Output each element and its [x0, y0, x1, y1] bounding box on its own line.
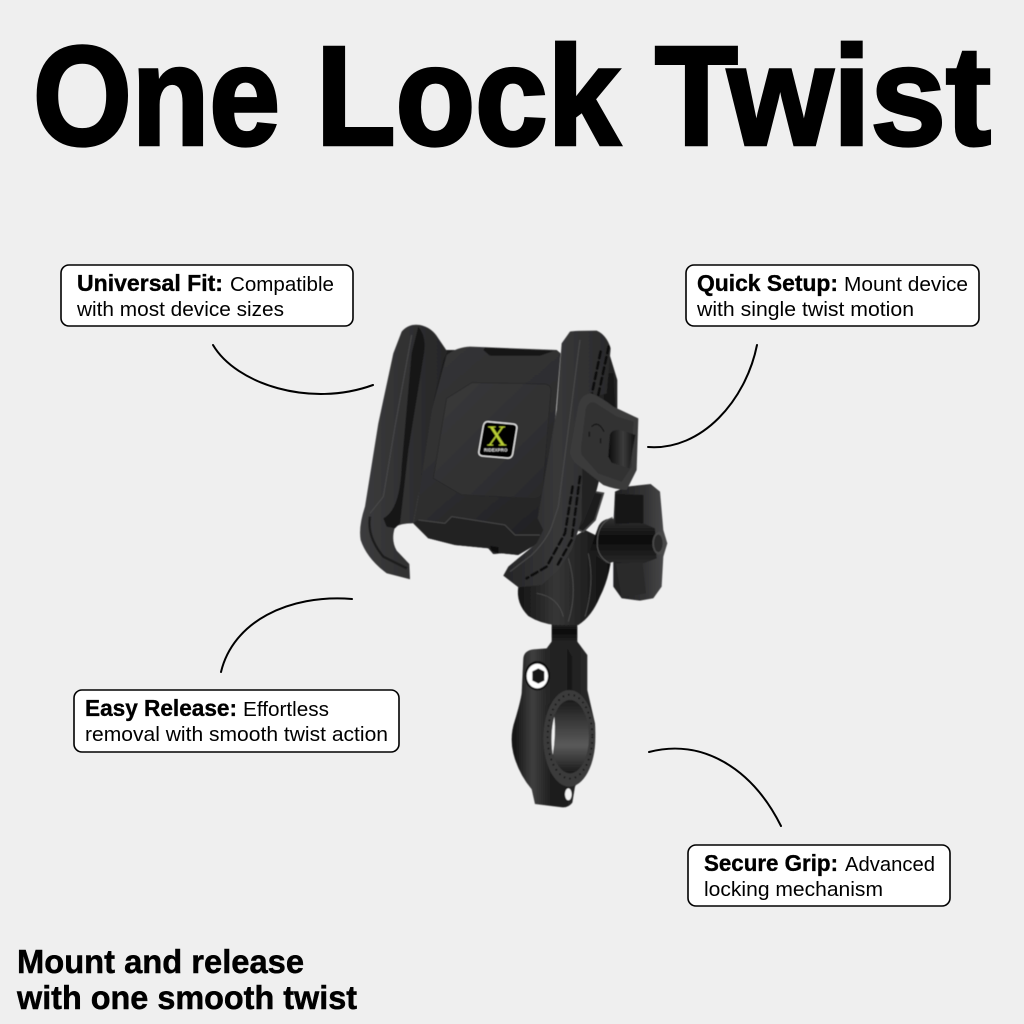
plate backing [413, 350, 460, 538]
callout: Quick Setup [686, 265, 979, 326]
callout: Quick Setup: Quick Setup: [697, 270, 838, 296]
connector: Easy Release [221, 598, 352, 672]
callout: Secure Grip [688, 845, 950, 906]
connector: Secure Grip [649, 749, 781, 826]
tagline: with one smooth twist [16, 979, 357, 1016]
connector: Quick Setup [648, 345, 757, 447]
logo badge [479, 421, 517, 458]
callout: Universal Fit: Universal Fit: [77, 270, 223, 296]
left arm [360, 325, 447, 579]
logo badge: RIDEXPRO [484, 447, 508, 452]
callout: Universal Fit [61, 265, 353, 326]
lock block [570, 393, 638, 490]
logo badge: X [487, 421, 507, 452]
title: Lock [316, 16, 621, 174]
callout: Easy Release: Easy Release: [85, 695, 237, 721]
callout: Quick Setup: with single twist motion [696, 298, 914, 321]
right arm [503, 331, 611, 587]
clamp assembly [512, 620, 595, 807]
tagline [16, 943, 357, 1016]
adjustment knob [613, 484, 667, 601]
callout: Easy Release [74, 690, 399, 752]
title: One [33, 16, 280, 174]
perforations [527, 347, 609, 578]
callout: Universal Fit: Compatible [230, 273, 334, 296]
tagline: Mount and release [17, 943, 304, 980]
title [33, 16, 991, 174]
callout: Secure Grip: Secure Grip: [704, 850, 838, 876]
product: phone mount [360, 325, 667, 807]
knob group [573, 484, 667, 601]
callout: Universal Fit: with most device sizes [76, 298, 284, 321]
callout: Quick Setup: Mount device [844, 273, 968, 296]
center plate [413, 347, 561, 555]
callout: Secure Grip: locking mechanism [704, 878, 883, 901]
title: Twist [655, 16, 991, 174]
callout: Secure Grip: Advanced [845, 853, 935, 876]
connector: Universal Fit [213, 345, 373, 394]
callout: Easy Release: Effortless [243, 698, 329, 721]
callout: Easy Release: removal with smooth twist action [85, 723, 388, 746]
back bracket [563, 345, 617, 543]
knob shaft [590, 518, 657, 563]
bracket clip [573, 490, 603, 532]
swivel ball [518, 530, 612, 625]
